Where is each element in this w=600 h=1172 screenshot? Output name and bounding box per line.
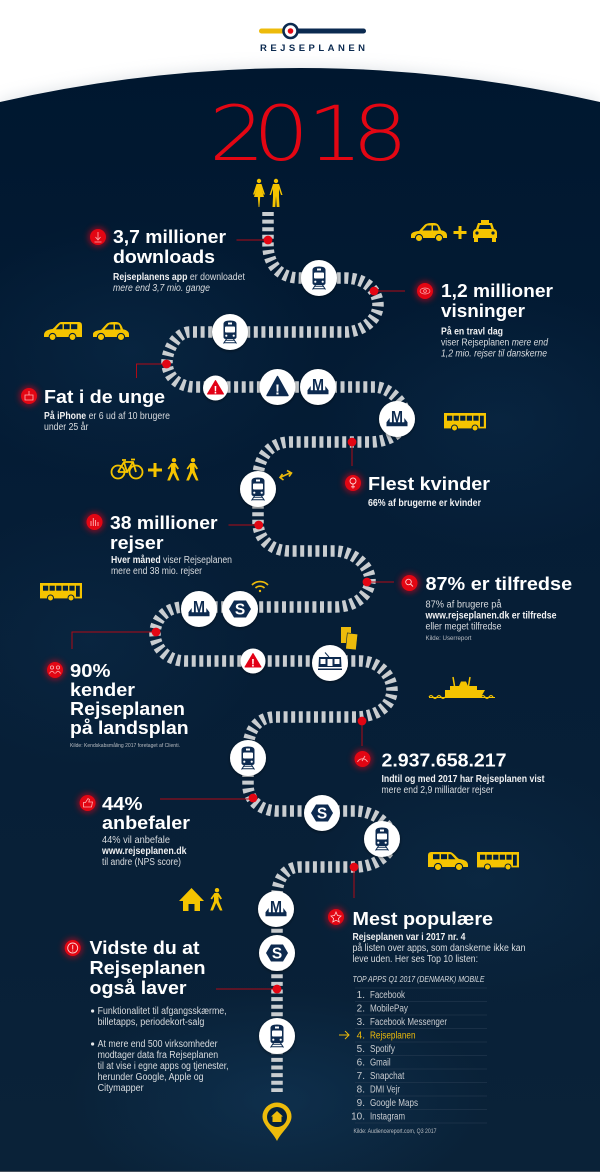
station: s-train 2: S xyxy=(317,806,327,822)
station: warning 3 xyxy=(240,648,266,674)
list: top 10 apps: 6. xyxy=(357,1058,365,1068)
icon: woman and man xyxy=(253,179,282,207)
panel: fat i de unge: Fat i de unge xyxy=(44,386,165,407)
icon: exclamation xyxy=(63,938,83,958)
station: train 5 xyxy=(364,821,400,857)
panel: vidste du at: også laver xyxy=(90,977,186,998)
icon: bicycle plus walkers xyxy=(112,458,198,480)
panel: vidste du at: Rejseplanen xyxy=(90,957,206,978)
panel: 38 millioner rejser: 38 millioner xyxy=(110,512,218,533)
panel: 2.937.658.217 xyxy=(352,749,545,796)
panel: 44% anbefaler: www.rejseplanen.dk xyxy=(101,846,187,857)
icon: eye xyxy=(415,281,435,301)
panel: 2.937.658.217: 2.937.658.217 xyxy=(382,750,506,770)
panel: 38 millioner rejser xyxy=(84,512,232,577)
icon: thumb up xyxy=(78,793,98,813)
station: tram xyxy=(312,645,348,681)
list: top 10 apps: Spotify xyxy=(370,1044,395,1055)
list: top 10 apps: 4. xyxy=(357,1030,365,1042)
station: small warning: ! xyxy=(214,384,217,396)
list: top 10 apps: Gmail xyxy=(370,1058,391,1068)
station: s-train 3 xyxy=(259,935,295,971)
station: metro 2: M xyxy=(391,408,403,426)
logo xyxy=(259,24,366,54)
icon: double arrow xyxy=(280,470,292,480)
list: top 10 apps: 1. xyxy=(357,990,365,1001)
icon: car plus taxi xyxy=(411,220,497,242)
panel: vidste du at: Funktionalitet til afgangsskærme, xyxy=(98,1006,227,1017)
title: 2018: 2018 xyxy=(209,91,408,178)
panel: 90% kender: kender xyxy=(70,679,135,700)
station: large warning: ! xyxy=(275,382,280,398)
icon: van and bus xyxy=(428,852,518,871)
station: train 4 xyxy=(230,740,266,776)
panel: 38 millioner rejser: rejser xyxy=(110,532,164,553)
list: top 10 apps: 2. xyxy=(357,1004,365,1014)
panel: flest kvinder xyxy=(343,473,490,509)
station: small warning xyxy=(203,376,228,400)
logo: REJSEPLANEN xyxy=(260,43,365,54)
station: train 1 xyxy=(301,260,337,296)
panel: vidste du at: At mere end 500 virksomheder xyxy=(98,1039,218,1050)
railway track xyxy=(155,212,405,1092)
list: top 10 apps: 3. xyxy=(357,1017,365,1028)
panel: visninger: 1,2 millioner xyxy=(441,280,553,301)
icon: destination pin xyxy=(262,1102,292,1141)
station: s-train: S xyxy=(235,602,245,618)
panel: downloads: Rejseplanens app er downloadet xyxy=(113,272,245,283)
panel: 90% kender: på landsplan xyxy=(70,717,189,738)
station: train 6 xyxy=(259,1018,295,1054)
panel: fat i de unge xyxy=(19,386,170,433)
panel: 87% er tilfredse: Kilde: Userreport xyxy=(426,635,472,642)
list: top 10 apps: DMI Vejr xyxy=(370,1084,401,1096)
list: top 10 apps: 9. xyxy=(357,1098,365,1109)
station: train 2 xyxy=(212,314,248,350)
panel: mest populære xyxy=(326,907,526,1135)
icon: female xyxy=(343,473,363,493)
panel: 38 millioner rejser: Hver måned viser Rejseplanen xyxy=(111,554,232,566)
list: top 10 apps: MobilePay xyxy=(370,1004,408,1014)
panel: 44% anbefaler: anbefaler xyxy=(102,812,190,833)
icon: download xyxy=(88,227,108,247)
panel: flest kvinder: 66% af brugerne er kvinder xyxy=(368,498,481,509)
station: metro 4: M xyxy=(270,898,282,916)
list: top 10 apps: 7. xyxy=(357,1071,365,1082)
station: warning 3: ! xyxy=(251,658,255,670)
panel: vidste du at: Vidste du at xyxy=(90,937,200,958)
panel: downloads: downloads xyxy=(113,246,215,267)
list: top 10 apps: Facebook Messenger xyxy=(370,1017,448,1028)
panel: 2.937.658.217: Indtil og med 2017 har Rejseplanen vist xyxy=(382,774,545,785)
station: s-train 3: S xyxy=(272,946,282,962)
panel: 87% er tilfredse xyxy=(400,573,572,642)
icon: hand xyxy=(19,386,39,406)
list: top 10 apps: 8. xyxy=(357,1084,365,1096)
panel: visninger: viser Rejseplanen mere end xyxy=(441,338,548,348)
icon: chart xyxy=(84,512,104,532)
list: top 10 apps: Facebook xyxy=(370,990,406,1001)
panel: 90% kender: Rejseplanen xyxy=(70,698,185,719)
list: top 10 apps: Instagram xyxy=(370,1112,405,1122)
list: top 10 apps: 10. xyxy=(351,1112,365,1122)
panel: visninger xyxy=(415,280,553,360)
panel: downloads: 3,7 millioner xyxy=(113,226,226,247)
panel: visninger: På en travl dag xyxy=(441,326,503,338)
panel: 90% kender xyxy=(45,660,189,749)
panel: mest populære: Mest populære xyxy=(352,908,493,929)
panel: 44% anbefaler: 44% xyxy=(102,793,142,814)
panel: visninger: visninger xyxy=(441,300,525,321)
station: metro: M xyxy=(312,376,324,394)
station: s-train xyxy=(222,591,258,627)
panel: 44% anbefaler: 44% vil anbefale xyxy=(102,835,170,846)
icon: wifi xyxy=(252,582,268,592)
panel: 38 millioner rejser: mere end 38 mio. rejser xyxy=(111,566,203,577)
panel: mest populære: Rejseplanen var i 2017 nr. 4 xyxy=(352,932,466,943)
station: train 3 xyxy=(240,471,276,507)
list: top 10 apps: 5. xyxy=(357,1044,365,1055)
panel: mest populære: leve uden. Her ses Top 10 listen: xyxy=(352,954,478,965)
panel: downloads xyxy=(88,226,245,294)
station: metro 3 xyxy=(181,591,217,627)
station: metro 2 xyxy=(379,401,415,437)
panel: 90% kender: 90% xyxy=(70,660,110,681)
list: top 10 apps: Google Maps xyxy=(370,1098,418,1109)
icon: people xyxy=(45,660,65,680)
station: large warning xyxy=(260,369,296,405)
icon: bus left xyxy=(41,584,81,601)
panel: mest populære: på listen over apps, som danskerne ikke kan xyxy=(352,942,526,954)
station: metro xyxy=(300,369,336,405)
icon: tickets xyxy=(341,627,358,650)
panel: 87% er tilfredse: www.rejseplanen.dk er tilfredse xyxy=(425,610,557,622)
station: s-train 2 xyxy=(304,795,340,831)
panel: 44% anbefaler xyxy=(78,793,190,868)
list: top 10 apps xyxy=(351,988,487,1123)
panel: vidste du at: modtager data fra Rejseplanen xyxy=(98,1050,218,1061)
station: metro 3: M xyxy=(193,598,205,616)
track markers: red dots xyxy=(152,236,378,993)
icon: gauge xyxy=(352,749,372,769)
panel: vidste du at: til at vise i egne apps og tjenester, xyxy=(98,1061,229,1072)
panel: fat i de unge: På iPhone er 6 ud af 10 brugere xyxy=(44,410,170,422)
icon: house and walker xyxy=(179,888,222,911)
panel: mest populære: TOP APPS Q1 2017 (DENMARK) MOBILE xyxy=(352,975,485,984)
connector lines xyxy=(72,240,405,989)
list: top 10 apps: Rejseplanen xyxy=(370,1030,416,1042)
station: metro 4 xyxy=(258,891,294,927)
icon: star xyxy=(326,907,346,927)
icon: magnifier xyxy=(400,573,420,593)
icon: van and car xyxy=(44,322,129,341)
icon: bus right xyxy=(445,414,485,431)
panel: mest populære: Kilde: Audiencereport.com, Q3 2017 xyxy=(354,1128,437,1135)
panel: 44% anbefaler: til andre (NPS score) xyxy=(102,857,181,868)
panel: 90% kender: Kilde: Kendskabsmåling 2017 foretaget af Clienti. xyxy=(70,742,180,749)
panel: vidste du at: billetapps, periodekort-salg xyxy=(98,1017,204,1028)
panel: vidste du at: herunder Google, Apple og xyxy=(98,1072,204,1083)
panel: flest kvinder: Flest kvinder xyxy=(368,473,490,494)
arrow: highlight rank 4 xyxy=(339,1031,349,1039)
icon: ferry xyxy=(429,677,495,698)
panel: 87% er tilfredse: 87% er tilfredse xyxy=(426,573,572,594)
list: top 10 apps: Snapchat xyxy=(370,1071,405,1082)
panel: vidste du at: Citymapper xyxy=(98,1083,144,1094)
panel: fat i de unge: under 25 år xyxy=(44,421,89,433)
panel: downloads: mere end 3,7 mio. gange xyxy=(113,283,210,294)
panel: vidste du at xyxy=(63,937,229,1094)
panel: 2.937.658.217: mere end 2,9 milliarder rejser xyxy=(382,785,494,796)
panel: visninger: 1,2 mio. rejser til danskerne xyxy=(441,348,547,360)
panel: 87% er tilfredse: eller meget tilfredse xyxy=(426,622,502,632)
panel: 87% er tilfredse: 87% af brugere på xyxy=(426,598,502,610)
